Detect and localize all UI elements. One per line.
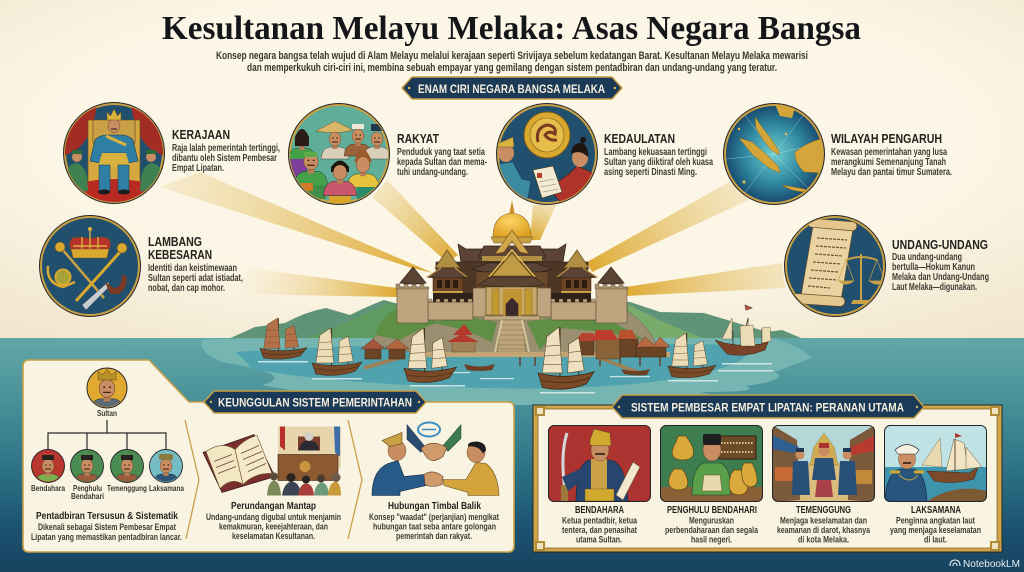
bendahara portrait: [32, 450, 64, 486]
description: tuhi undang-undang.: [397, 167, 468, 178]
heading: KERAJAAN: [172, 127, 230, 142]
intro text: Konsep negara bangsa telah wujud di Alam Melayu melalui kerajaan seperti Srivijaya sebelum kedatangan Barat. Kesultanan Melayu Melaka mewarisi: [216, 50, 808, 62]
harbour piers and stilt villages: [361, 324, 670, 373]
role text: Menjaga keselamatan dan: [780, 516, 867, 526]
paper background: [0, 0, 1024, 340]
role text: [562, 516, 638, 546]
intro text: [216, 50, 808, 74]
card: laksamana: [884, 425, 987, 546]
heading: [148, 234, 212, 262]
tree connectors: [48, 420, 166, 449]
heading: WILAYAH PENGARUH: [831, 131, 942, 146]
role text: [890, 516, 981, 546]
role text: Menguruskan: [689, 516, 734, 526]
palace hill: [372, 306, 658, 356]
description: Kewasan pemerintahan yang lusa: [831, 147, 947, 158]
description: [831, 147, 952, 178]
mountains behind the palace: [226, 300, 806, 342]
banner: enam ciri: [402, 77, 622, 99]
description: [148, 263, 243, 294]
description: Sultan yang diiktiraf oleh kuasa: [604, 157, 713, 168]
penghulu bendahari portrait: [70, 450, 104, 486]
left tower: [396, 267, 429, 323]
temenggung portrait: [110, 450, 144, 486]
role text: [777, 516, 871, 546]
icon: crown and regalia: [39, 215, 141, 317]
role text: [665, 516, 759, 546]
description: Laut Melaka—digunakan.: [892, 282, 977, 293]
ships in the harbour: [260, 305, 771, 389]
left village: [361, 339, 409, 359]
heading: UNDANG-UNDANG: [892, 237, 988, 252]
description: Sultan seperti adat istiadat,: [148, 273, 243, 284]
role text: di laut.: [924, 534, 947, 546]
card: temenggung: [772, 425, 875, 546]
official labels: Laksamana: [149, 483, 184, 493]
heading: LAMBANG: [148, 234, 202, 249]
staircase: [495, 320, 529, 352]
panel: keunggulan sistem pemerintahan: [23, 360, 514, 552]
illustration: admiral and ship: [884, 425, 987, 502]
official labels: Temenggung: [107, 483, 147, 493]
description: bertulla—Hokum Kanun: [892, 262, 975, 273]
role name: PENGHULU BENDAHARI: [667, 504, 757, 516]
description: Empat Lipatan.: [172, 163, 224, 174]
description: Dua undang-undang: [892, 252, 962, 263]
heading: KEDAULATAN: [604, 131, 675, 146]
icon: ruler and subject handshake: [372, 422, 499, 496]
banner: sistem pembesar: [612, 395, 924, 418]
upper roof tiers: [436, 230, 588, 302]
centre gable: [472, 250, 552, 288]
illustration: treasurer: [660, 425, 763, 502]
right wing: [551, 250, 597, 302]
icon: court scene: [267, 426, 341, 496]
galleon on the right: [715, 305, 771, 355]
arrow divider one: [185, 420, 199, 539]
hill greenery: [375, 309, 645, 350]
official labels: Bendahari: [71, 491, 104, 501]
column three text: [369, 500, 500, 542]
illustration: market guards: [772, 425, 875, 502]
arrow divider two: [348, 420, 362, 539]
sultan portrait: [87, 368, 127, 414]
column two text: Undang-undang digubal untuk menjamin: [206, 512, 341, 523]
role name: TEMENGGUNG: [796, 504, 851, 516]
official labels: Penghulu: [73, 483, 102, 493]
description: nobat, dan cap mohor.: [148, 283, 225, 294]
right tower: [595, 267, 628, 323]
feature: kerajaan: [63, 102, 280, 204]
description: Melaka dan Undang-Undang: [892, 272, 989, 283]
shallow water around the harbour: [201, 338, 812, 405]
description: [397, 147, 487, 178]
panel: sistem pembesar empat lipatan: [533, 405, 1002, 552]
icon: glowing map: [723, 103, 825, 205]
description: Identiti dan keistimewaan: [148, 263, 237, 274]
description: dibantu oleh Sistem Pembesar: [172, 153, 277, 164]
curtain walls: [428, 288, 596, 320]
sea: [0, 338, 1024, 572]
column three text: pemerintah dan rakyat.: [396, 531, 472, 542]
heading: KEBESARAN: [148, 247, 212, 262]
laksamana portrait: [150, 450, 182, 486]
column one text: [31, 510, 182, 543]
feature: rakyat: [288, 103, 487, 206]
palace: [396, 200, 628, 352]
description: asing seperti Dinasti Ming.: [604, 167, 697, 178]
icon: scroll and scales: [784, 215, 886, 317]
feature: lambang kebesaran: [39, 215, 243, 317]
icon: seal and treaty: [496, 103, 598, 205]
role name: BENDAHARA: [575, 504, 624, 516]
icon: people: [288, 103, 391, 206]
banner: sistem pembesar: SISTEM PEMBESAR EMPAT LIPATAN: PERANAN UTAMA: [631, 400, 904, 414]
role name: LAKSAMANA: [911, 504, 961, 516]
dome: [491, 200, 533, 243]
description: Penduduk yang taat setia: [397, 147, 485, 158]
description: kepada Sultan dan mema-: [397, 157, 487, 168]
official labels: [31, 483, 184, 501]
red pavilion: [447, 324, 479, 352]
column three text: Hubungan Timbal Balik: [388, 500, 481, 512]
banner: keunggulan: KEUNGGULAN SISTEM PEMERINTAHAN: [218, 396, 412, 410]
notebooklm watermark: NotebookLM: [963, 559, 1020, 570]
role text: Ketua pentadbir, ketua: [562, 516, 638, 526]
description: [892, 252, 989, 293]
official labels: Bendahara: [31, 483, 65, 493]
column two text: kemakmuran, keeejahteraan, dan: [219, 522, 328, 532]
banner: enam ciri: ENAM CIRI NEGARA BANGSA MELAKA: [418, 82, 605, 96]
column one text: Pentadbiran Tersusun & Sistematik: [36, 510, 178, 522]
description: [604, 147, 713, 178]
role text: yang menjaga keselamatan: [890, 525, 981, 536]
role text: Penginna angkatan laut: [896, 516, 976, 526]
icon: open law book: [203, 434, 275, 492]
description: merangkumi Semenanjung Tanah: [831, 157, 946, 168]
banner: keunggulan: [204, 391, 426, 413]
title: Kesultanan Melayu Melaka: Asas Negara Bangsa: [162, 10, 861, 47]
feature: undang-undang: [784, 215, 989, 317]
feature: kedaulatan: [496, 103, 713, 205]
column one text: Dikenali sebagai Sistem Pembesar Empat: [38, 522, 177, 533]
heading: RAKYAT: [397, 131, 439, 146]
icon: sultan on throne: [63, 102, 165, 204]
role text: hasil negeri.: [691, 534, 732, 546]
description: Lambang kekuasaan tertinggi: [604, 147, 707, 158]
sultan label: Sultan: [97, 408, 117, 418]
role text: di kota Melaka.: [798, 534, 849, 546]
corner ornaments: [536, 407, 999, 550]
golden rays from the palace to the six features: [160, 172, 785, 297]
left wing: [427, 250, 473, 302]
column one text: Lipatan yang memastikan pentadbiran lancar.: [31, 532, 182, 543]
column three text: Konsep "waadat" (perjanjian) mengikat: [369, 512, 500, 523]
column three text: hubungan taat seba antare golongan: [373, 522, 496, 532]
role text: utama Sultan.: [576, 534, 622, 546]
card: penghulu bendahari: [660, 425, 763, 546]
illustration: bendahara: [548, 425, 651, 502]
feature: wilayah pengaruh: [723, 103, 952, 205]
role text: perbendaharaan dan segala: [665, 525, 759, 536]
role text: keamanan di darot, khasnya: [777, 525, 871, 536]
intro text: dan memperkukuh ciri-ciri ini, membina sebuah empayar yang gemilang dengan sistem pentadbiran dan undang-undang yang teratur.: [247, 62, 777, 74]
description: Raja lalah pemerintah tertinggi,: [172, 143, 280, 154]
column two text: [206, 500, 341, 542]
org chart: sultan and four officials: [31, 368, 184, 501]
right village: [575, 330, 670, 359]
gatehouse and door: [484, 287, 540, 320]
role text: tentera, dan penasihat: [562, 525, 638, 536]
column two text: keselamatan Kesultanan.: [232, 531, 315, 542]
description: [172, 143, 280, 174]
column two text: Perundangan Mantap: [231, 500, 316, 512]
card: bendahara: [548, 425, 651, 546]
description: Melayu dan pantai timur Sumatera.: [831, 167, 952, 178]
